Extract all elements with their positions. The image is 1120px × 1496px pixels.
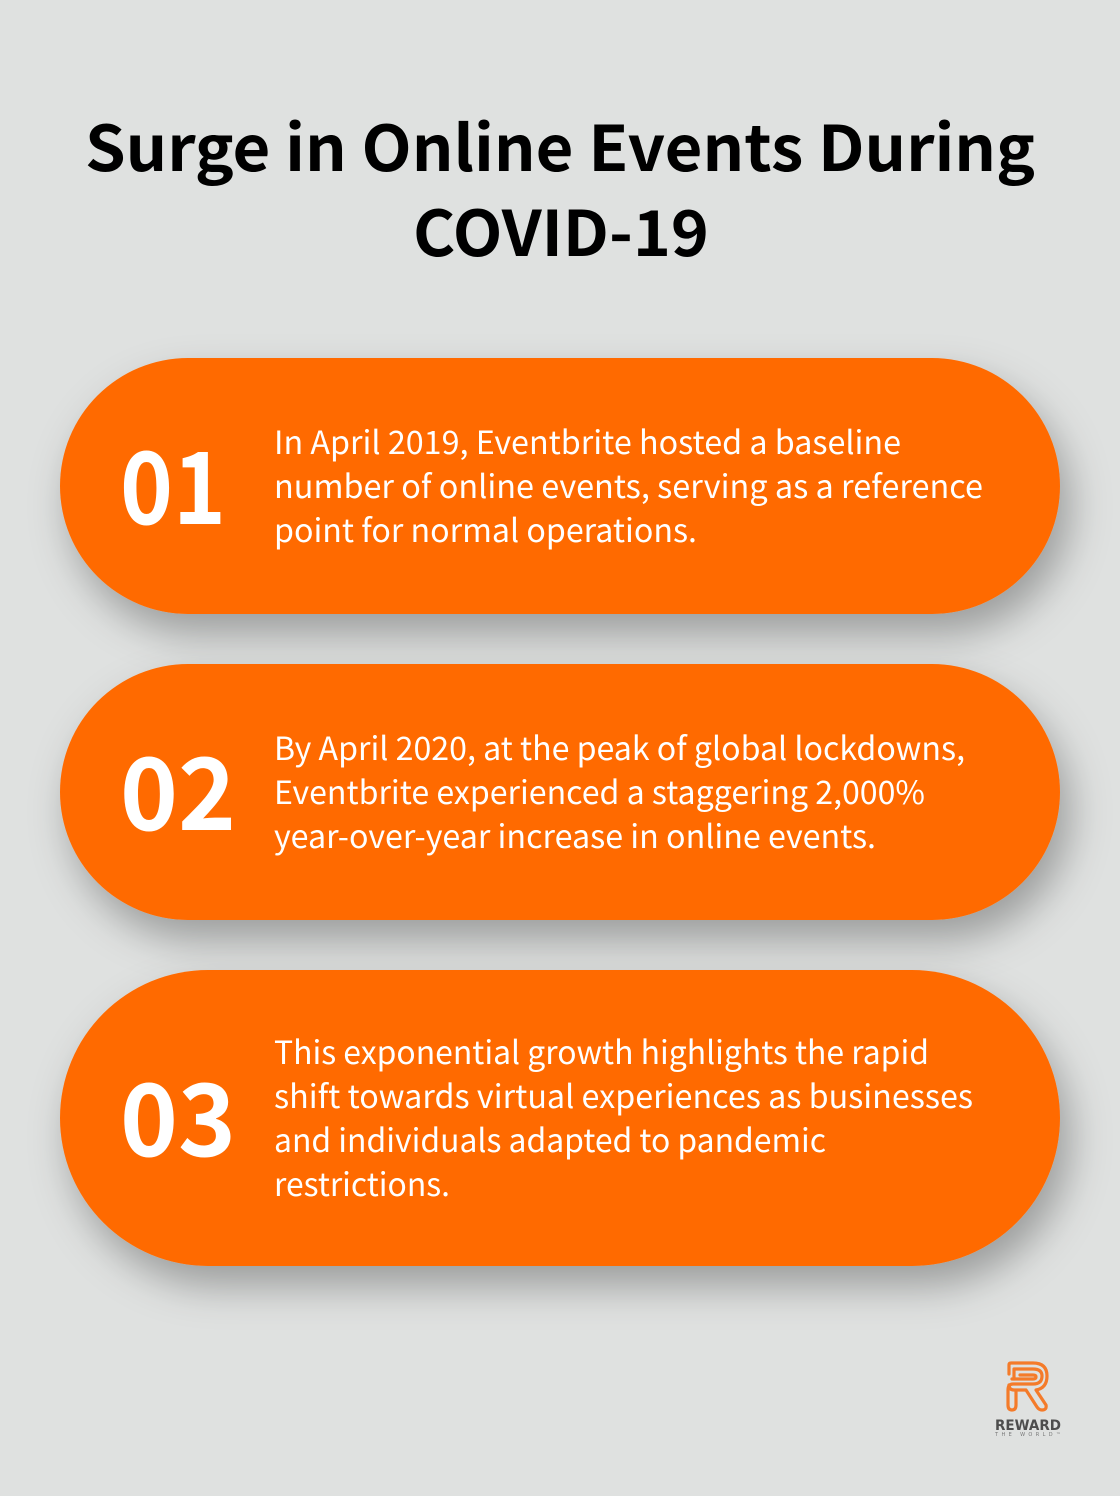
number 01: 01	[120, 408, 226, 553]
text block 03	[274, 1028, 973, 1206]
title: Surge in Online Events During	[85, 99, 1035, 190]
text block 03: restrictions.	[274, 1160, 450, 1206]
title	[85, 99, 1035, 275]
number 02: 02	[120, 714, 236, 859]
text block 01: In April 2019, Eventbrite hosted a baseline	[274, 418, 901, 464]
pill background 03	[60, 970, 1060, 1266]
text block 01: number of online events, serving as a reference	[274, 462, 983, 508]
pill background 02	[60, 664, 1060, 920]
number 03: 03	[120, 1040, 236, 1185]
text block 03: and individuals adapted to pandemic	[274, 1116, 826, 1162]
text block 03: This exponential growth highlights the rapid	[274, 1028, 929, 1074]
title: COVID-19	[413, 184, 709, 275]
text block 02: year-over-year increase in online events.	[274, 812, 876, 858]
text block 01	[274, 418, 983, 552]
text block 03: shift towards virtual experiences as businesses	[274, 1072, 973, 1118]
text block 01: point for normal operations.	[274, 506, 697, 552]
pill background 01	[60, 358, 1060, 614]
text block 02: By April 2020, at the peak of global lockdowns,	[274, 724, 965, 770]
wordmark: REWARD	[995, 1418, 1061, 1434]
panel: step 01	[60, 358, 1060, 614]
text block 02	[274, 724, 965, 858]
logo: Reward the World	[994, 1363, 1061, 1438]
panel: step 02	[60, 664, 1060, 920]
icon: stylised R	[1008, 1363, 1047, 1410]
panel: step 03	[60, 970, 1060, 1266]
text block 02: Eventbrite experienced a staggering 2,000%	[274, 768, 925, 814]
tagline: THE WORLD™	[994, 1432, 1061, 1438]
